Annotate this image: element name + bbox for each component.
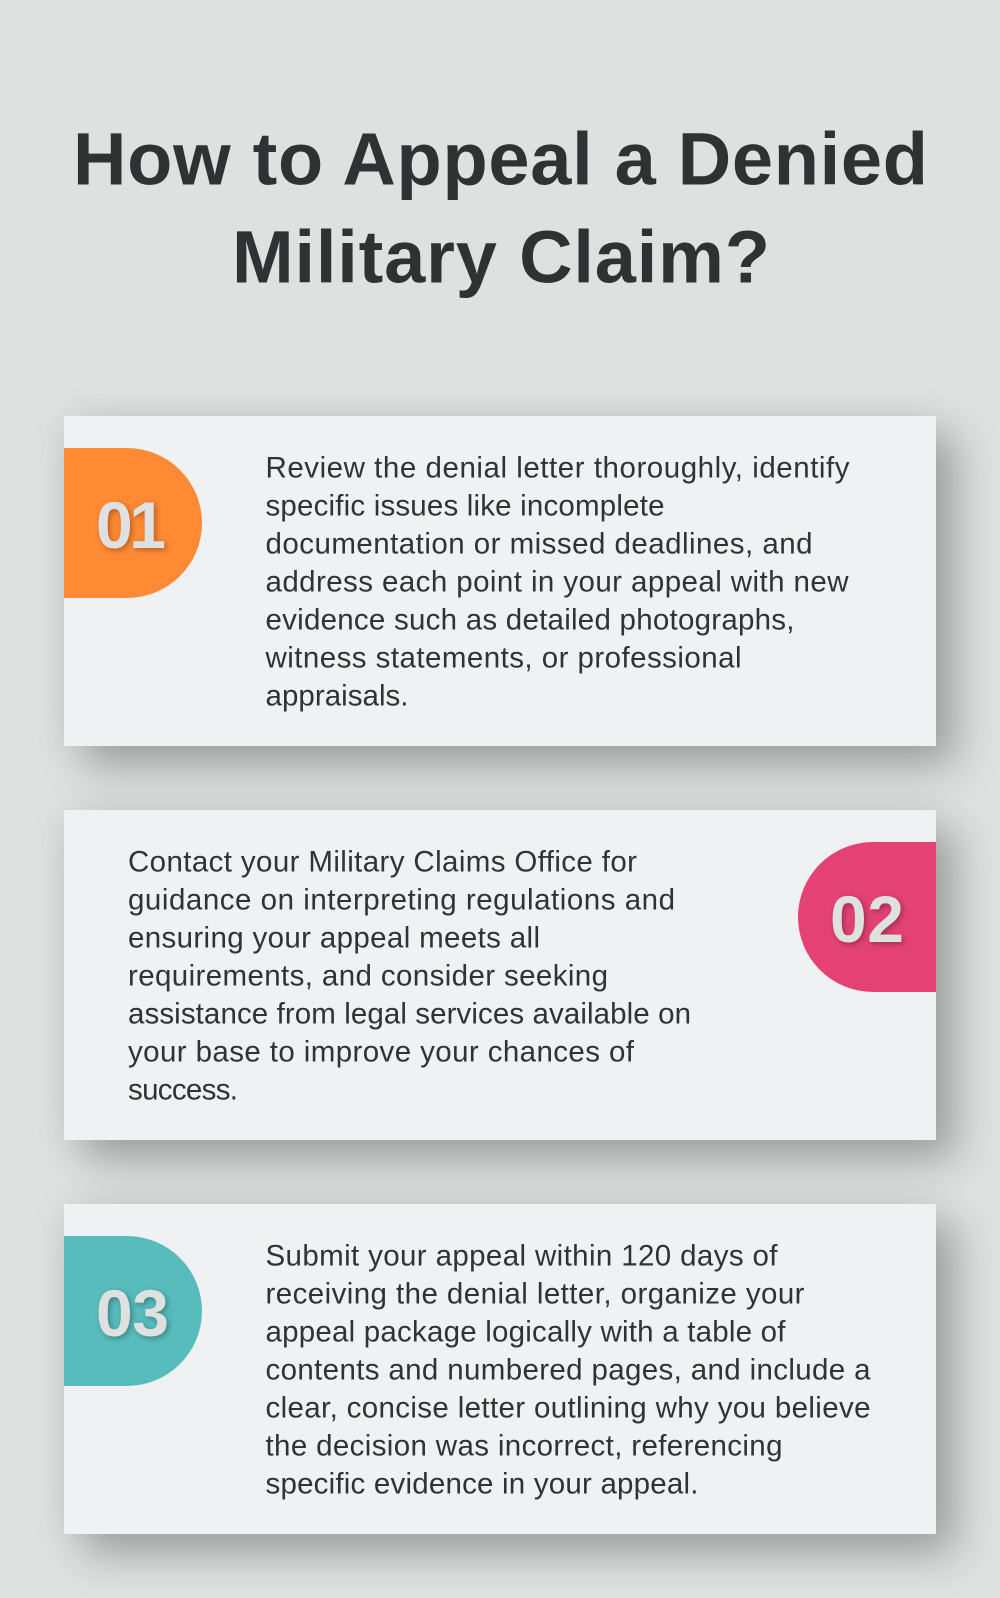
text: step 3 description: contents and numbered pages, and include a bbox=[266, 1354, 871, 1386]
text: step 1 description: documentation or missed deadlines, and bbox=[266, 528, 812, 560]
text: step 3 description: receiving the denial letter, organize your bbox=[266, 1278, 805, 1310]
title: How to Appeal a Denied bbox=[73, 118, 928, 200]
text: step 1 description: evidence such as detailed photographs, bbox=[266, 604, 794, 636]
text: step 2 description: guidance on interpreting regulations and bbox=[128, 884, 675, 916]
text: step 2 description: your base to improve your chances of bbox=[128, 1036, 635, 1068]
text: step 1 description bbox=[264, 452, 850, 712]
panel: step 1 bbox=[64, 416, 936, 746]
badge: 02 bbox=[798, 842, 936, 992]
text: step 2 description: requirements, and consider seeking bbox=[128, 960, 608, 992]
text: step 1 description: Review the denial letter thoroughly, identify bbox=[266, 452, 850, 484]
text: step 1 description: address each point in your appeal with new bbox=[266, 566, 849, 598]
panel: step 3 bbox=[64, 1204, 936, 1534]
text: step 3 description: clear, concise letter outlining why you believe bbox=[266, 1392, 870, 1424]
title: Military Claim? bbox=[232, 216, 770, 298]
text: step 3 description: specific evidence in your appeal. bbox=[266, 1468, 698, 1500]
text: step 2 description bbox=[128, 846, 691, 1106]
badge: 03 bbox=[64, 1236, 202, 1386]
text: step 3 description: Submit your appeal within 120 days of bbox=[266, 1240, 778, 1272]
text: step 3 description: the decision was incorrect, referencing bbox=[266, 1430, 782, 1462]
text: step 1 description: specific issues like incomplete bbox=[266, 490, 664, 522]
panel: step 2 bbox=[64, 810, 936, 1140]
text: step 2 description: ensuring your appeal meets all bbox=[128, 922, 540, 954]
text: step 2 description: assistance from legal services available on bbox=[128, 998, 691, 1030]
badge: 01: 01 bbox=[96, 488, 166, 562]
text: step 2 description: Contact your Military Claims Office for bbox=[128, 846, 637, 878]
text: step 2 description: success. bbox=[128, 1074, 238, 1106]
text: step 1 description: appraisals. bbox=[266, 680, 408, 712]
badge: 02: 02 bbox=[830, 882, 904, 956]
badge: 01 bbox=[64, 448, 202, 598]
text: step 1 description: witness statements, or professional bbox=[264, 642, 742, 674]
text: step 3 description: appeal package logically with a table of bbox=[266, 1316, 786, 1348]
badge: 03: 03 bbox=[96, 1276, 169, 1350]
title bbox=[73, 118, 928, 298]
text: step 3 description bbox=[266, 1240, 871, 1500]
